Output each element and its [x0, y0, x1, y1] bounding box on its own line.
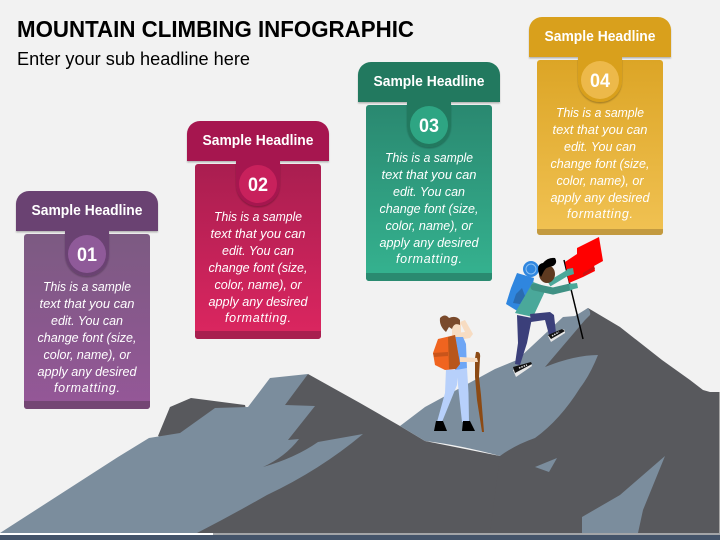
figure: female hiker	[433, 316, 484, 432]
panel 03	[358, 62, 500, 281]
panel 01: edit. You can	[51, 314, 123, 328]
panel 01: apply any desired	[38, 365, 138, 379]
panel 04: change font (size,	[550, 157, 650, 171]
panel 02: text that you can	[210, 227, 306, 241]
panel 02	[187, 121, 329, 339]
panel 04: This is a sample	[556, 106, 644, 120]
panel 04: text that you can	[552, 123, 648, 137]
panel 01	[16, 191, 158, 409]
panel 03: color, name), or	[386, 219, 473, 233]
title: MOUNTAIN CLIMBING INFOGRAPHIC	[17, 16, 414, 42]
panel 02: Sample Headline	[202, 133, 314, 149]
panel 02: apply any desired	[208, 295, 309, 309]
panel 03: This is a sample	[385, 151, 473, 165]
subtitle: Enter your sub headline here	[17, 49, 250, 69]
panel 03: apply any desired	[380, 236, 480, 250]
illustration: mountains	[0, 308, 720, 533]
panel 03: Sample Headline	[374, 74, 484, 90]
panel 04: 04	[590, 71, 610, 92]
ground strip	[0, 533, 720, 540]
panel 04: edit. You can	[564, 140, 636, 154]
panel 02: This is a sample	[214, 210, 302, 224]
figure: climber with flag	[506, 237, 603, 377]
panel 03: change font (size,	[380, 202, 478, 216]
panel 04: color, name), or	[556, 174, 644, 188]
panel 01: text that you can	[40, 297, 135, 311]
panel 03: text that you can	[382, 168, 477, 182]
panel 02: 02	[248, 175, 268, 196]
panel 04	[529, 17, 671, 235]
panel 02: edit. You can	[222, 244, 294, 258]
panel 01: change font (size,	[38, 331, 136, 345]
panel 01: color, name), or	[44, 348, 131, 362]
panel 04: Sample Headline	[544, 29, 656, 45]
panel 02: color, name), or	[214, 278, 302, 292]
panel 03: formatting.	[396, 252, 462, 266]
panel 02: change font (size,	[208, 261, 308, 275]
panel 01: This is a sample	[43, 280, 131, 294]
panel 03: 03	[419, 116, 439, 137]
panel 03: edit. You can	[393, 185, 465, 199]
panel 04: formatting.	[567, 207, 633, 221]
panel 01: Sample Headline	[32, 203, 142, 219]
panel 01: 01	[77, 245, 97, 266]
panel 02: formatting.	[225, 311, 291, 325]
panel 04: apply any desired	[550, 191, 651, 205]
panel 01: formatting.	[54, 381, 120, 395]
